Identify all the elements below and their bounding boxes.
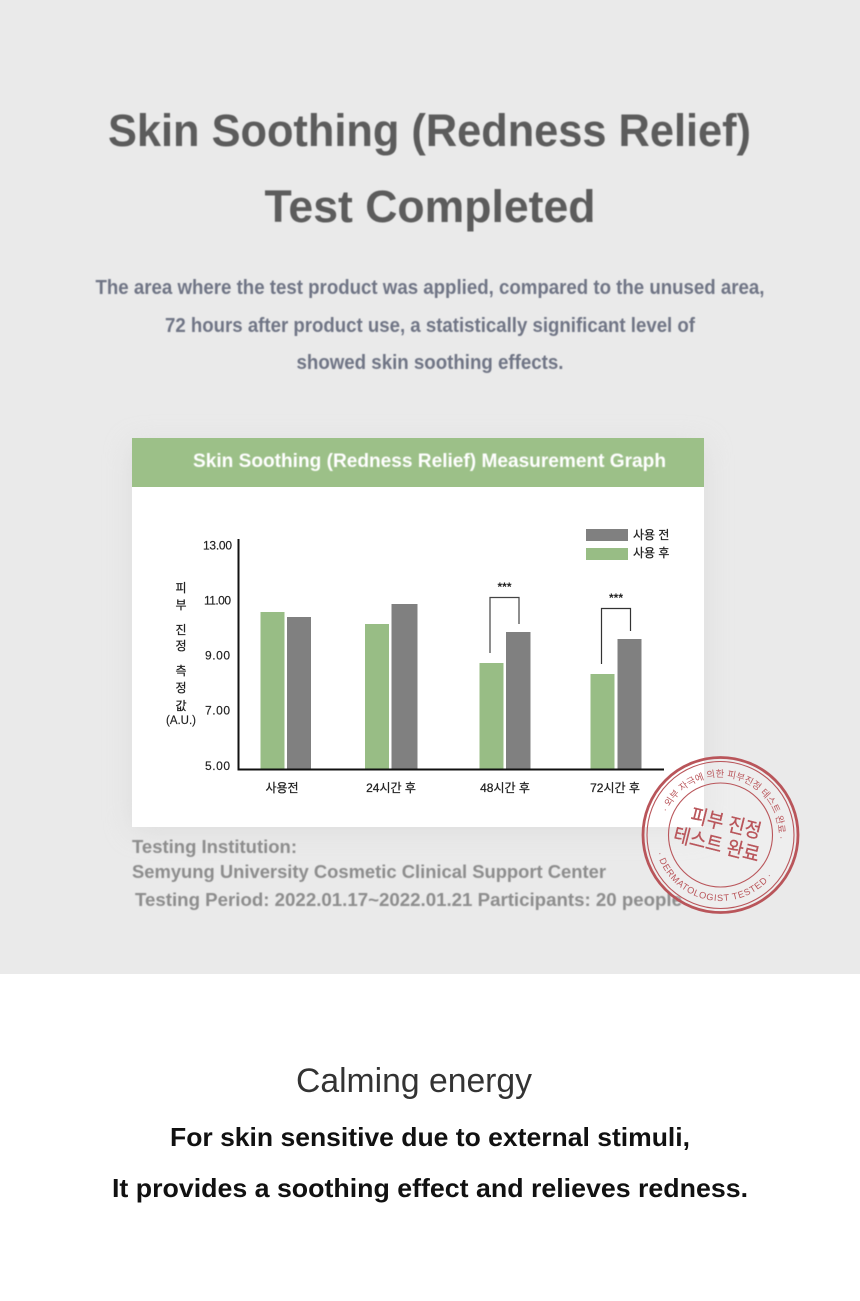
y axis title: 값 bbox=[175, 699, 187, 713]
y axis title: 정 bbox=[175, 681, 187, 695]
y axis title: (A.U.) bbox=[166, 715, 196, 727]
y axis title: 피 bbox=[175, 581, 187, 595]
y axis title: 정 bbox=[175, 639, 187, 653]
significance bracket 72h bbox=[602, 591, 630, 664]
description text: 72 hours after product use, a statistically significant level of bbox=[165, 315, 695, 337]
testing information: Semyung University Cosmetic Clinical Support Center bbox=[132, 862, 606, 882]
legend bbox=[586, 528, 669, 560]
panel: graph card bbox=[132, 438, 704, 827]
card shadow bbox=[132, 445, 704, 830]
x axis labels: 사용전 bbox=[265, 781, 299, 795]
y axis labels: 13.00 bbox=[203, 538, 232, 552]
description text: showed skin soothing effects. bbox=[296, 352, 564, 374]
title: Test Completed bbox=[264, 181, 596, 232]
y axis title: 부 bbox=[175, 598, 187, 612]
grey background panel bbox=[0, 0, 860, 974]
icon: test completed stamp bbox=[642, 756, 800, 914]
x axis labels bbox=[265, 781, 640, 795]
heading: Calming energy: Calming energy bbox=[296, 1062, 532, 1100]
bar chart bbox=[166, 528, 669, 795]
closing statement: For skin sensitive due to external stimuli, bbox=[170, 1122, 690, 1152]
legend: 사용 전 bbox=[633, 528, 669, 542]
closing statement: It provides a soothing effect and relieves redness. bbox=[112, 1173, 748, 1203]
icon: test completed stamp: · 외부 자극에 의한 피부진정 테스트 완료 · bbox=[664, 769, 786, 838]
y axis labels: 5.00 bbox=[205, 759, 230, 773]
closing statement bbox=[112, 1122, 748, 1203]
significance bracket 48h bbox=[490, 580, 519, 653]
testing information bbox=[132, 837, 682, 910]
significance bracket 72h: *** bbox=[609, 591, 623, 605]
axes bbox=[238, 539, 664, 770]
y axis labels: 11.00 bbox=[204, 594, 231, 608]
icon: test completed stamp: · DERMATOLOGIST TESTED · bbox=[659, 853, 770, 902]
title bbox=[108, 105, 751, 232]
x axis labels: 24시간 후 bbox=[366, 781, 416, 795]
y axis labels: 7.00 bbox=[205, 704, 230, 718]
y axis title: 진 bbox=[175, 623, 187, 637]
y axis title: 측 bbox=[175, 664, 187, 678]
bars bbox=[260, 604, 642, 769]
description text bbox=[96, 277, 764, 374]
x axis labels: 72시간 후 bbox=[590, 781, 640, 795]
graph heading: Skin Soothing (Redness Relief) Measurement Graph bbox=[193, 451, 666, 472]
y axis labels bbox=[203, 538, 232, 773]
x axis labels: 48시간 후 bbox=[480, 781, 530, 795]
title: Skin Soothing (Redness Relief) bbox=[108, 105, 751, 156]
icon: test completed stamp: 피부 진정 bbox=[688, 804, 764, 843]
legend: 사용 후 bbox=[633, 546, 669, 560]
testing information: Testing Period: 2022.01.17~2022.01.21 Participants: 20 people bbox=[135, 890, 682, 910]
y axis title bbox=[166, 581, 196, 727]
description text: The area where the test product was applied, compared to the unused area, bbox=[96, 277, 764, 299]
graph header band bbox=[132, 438, 704, 487]
icon: test completed stamp: 테스트 완료 bbox=[671, 823, 762, 867]
testing information: Testing Institution: bbox=[132, 837, 297, 857]
significance bracket 48h: *** bbox=[497, 580, 512, 594]
y axis labels: 9.00 bbox=[205, 648, 230, 662]
